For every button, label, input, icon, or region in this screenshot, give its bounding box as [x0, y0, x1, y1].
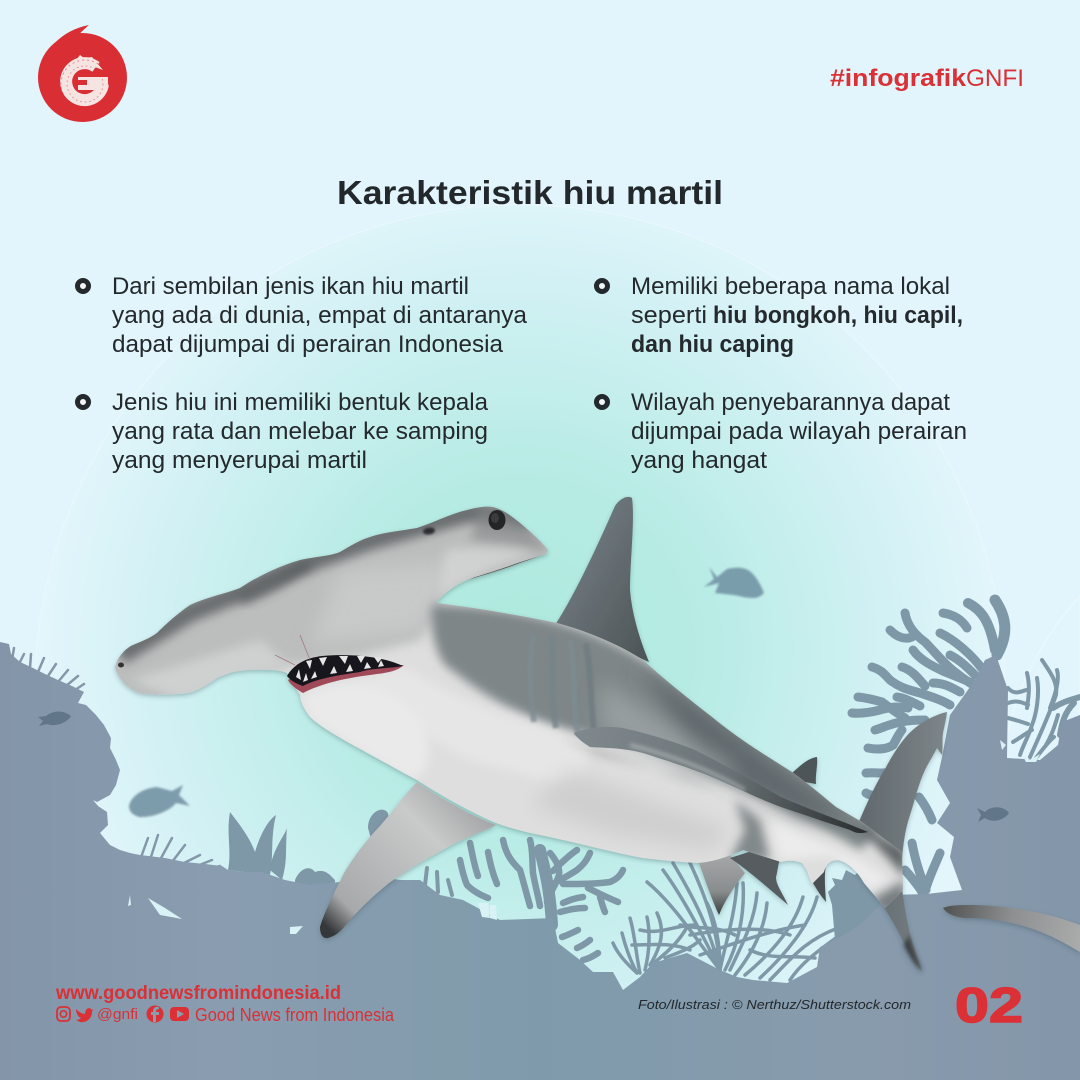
bullet 4: dijumpai pada wilayah perairan — [631, 418, 967, 445]
fish: right — [977, 807, 1009, 822]
eye — [488, 510, 506, 530]
bullet 3: Memiliki beberapa nama lokal — [631, 273, 950, 300]
coral: right branching tree — [852, 600, 1005, 892]
bullet 1: Dari sembilan jenis ikan hiu martil — [112, 273, 469, 300]
bullet 4: yang hangat — [631, 447, 767, 474]
head shading — [115, 506, 548, 694]
bullet 1 — [78, 273, 528, 358]
bullet 3: seperti — [631, 302, 707, 329]
bullet list: left — [78, 273, 528, 474]
right pectoral fin — [574, 727, 868, 833]
nostril — [423, 527, 435, 535]
detached tail fragment — [943, 905, 1080, 952]
coral: centre branching — [425, 840, 623, 960]
bullet 1: yang ada di dunia, empat di antaranya — [112, 302, 528, 329]
bullet 2: yang menyerupai martil — [112, 447, 367, 474]
icon: instagram — [57, 1007, 70, 1021]
bullet 1: dapat dijumpai di perairan Indonesia — [112, 331, 504, 358]
background right circle arc — [1000, 596, 1080, 1004]
second dorsal fin — [792, 757, 817, 784]
footer social row — [57, 1005, 395, 1025]
body and head — [113, 506, 904, 908]
bullet 4 — [596, 389, 967, 474]
photo credit: Foto/Ilustrasi : © Nerthuz/Shutterstock.com — [638, 997, 911, 1012]
coral: rear cluster by tail — [828, 868, 885, 940]
fish: upper right — [704, 567, 764, 598]
footer website: www.goodnewsfromindonesia.id — [55, 983, 341, 1004]
rear small fin — [802, 860, 826, 902]
coral: leaves near fin — [228, 810, 388, 900]
coral: right seagrass — [1008, 660, 1080, 758]
bullet 3: dan hiu caping — [631, 331, 794, 358]
icon: youtube — [170, 1007, 189, 1021]
background water circle — [35, 205, 1005, 1080]
hashtag: GNFI — [966, 65, 1024, 92]
coral: grass tufts — [12, 648, 220, 870]
bullet 4: Wilayah penyebarannya dapat — [631, 389, 950, 416]
icon: facebook — [146, 1006, 164, 1022]
seabed light specks — [128, 740, 1040, 934]
back — [432, 605, 880, 850]
seabed silhouette — [0, 642, 1080, 1080]
teeth — [296, 656, 384, 682]
tail tip dark — [904, 935, 922, 971]
dorsal fin — [555, 497, 649, 662]
left pectoral fin — [320, 782, 496, 938]
title: Karakteristik hiu martil — [337, 174, 723, 211]
icon: twitter — [76, 1008, 93, 1022]
fish: lower left — [129, 785, 190, 817]
shark — [100, 480, 1080, 971]
page number: 02 — [955, 979, 1023, 1033]
tail — [858, 712, 947, 971]
handle: @gnfi — [97, 1006, 138, 1023]
channel name: Good News from Indonesia — [195, 1005, 395, 1025]
gills — [530, 634, 595, 740]
bullet 3 — [596, 273, 963, 358]
bullet list: right — [596, 273, 967, 474]
hashtag — [830, 65, 1024, 92]
bullet 2: Jenis hiu ini memiliki bentuk kepala — [112, 389, 489, 416]
belly tone — [544, 770, 717, 846]
nose tip — [118, 662, 124, 668]
fish: far left — [38, 711, 71, 726]
anal fin — [730, 850, 788, 905]
hashtag: #infografik — [830, 65, 967, 92]
ventral fin — [698, 855, 745, 915]
logo G emblem — [61, 55, 109, 108]
coral: fan — [613, 863, 840, 980]
bullet 3: hiu bongkoh, hiu capil, — [713, 302, 963, 329]
bullet 2 — [78, 389, 489, 474]
bullet 2: yang rata dan melebar ke samping — [112, 418, 488, 445]
mouth — [275, 635, 404, 693]
logo — [38, 25, 127, 122]
